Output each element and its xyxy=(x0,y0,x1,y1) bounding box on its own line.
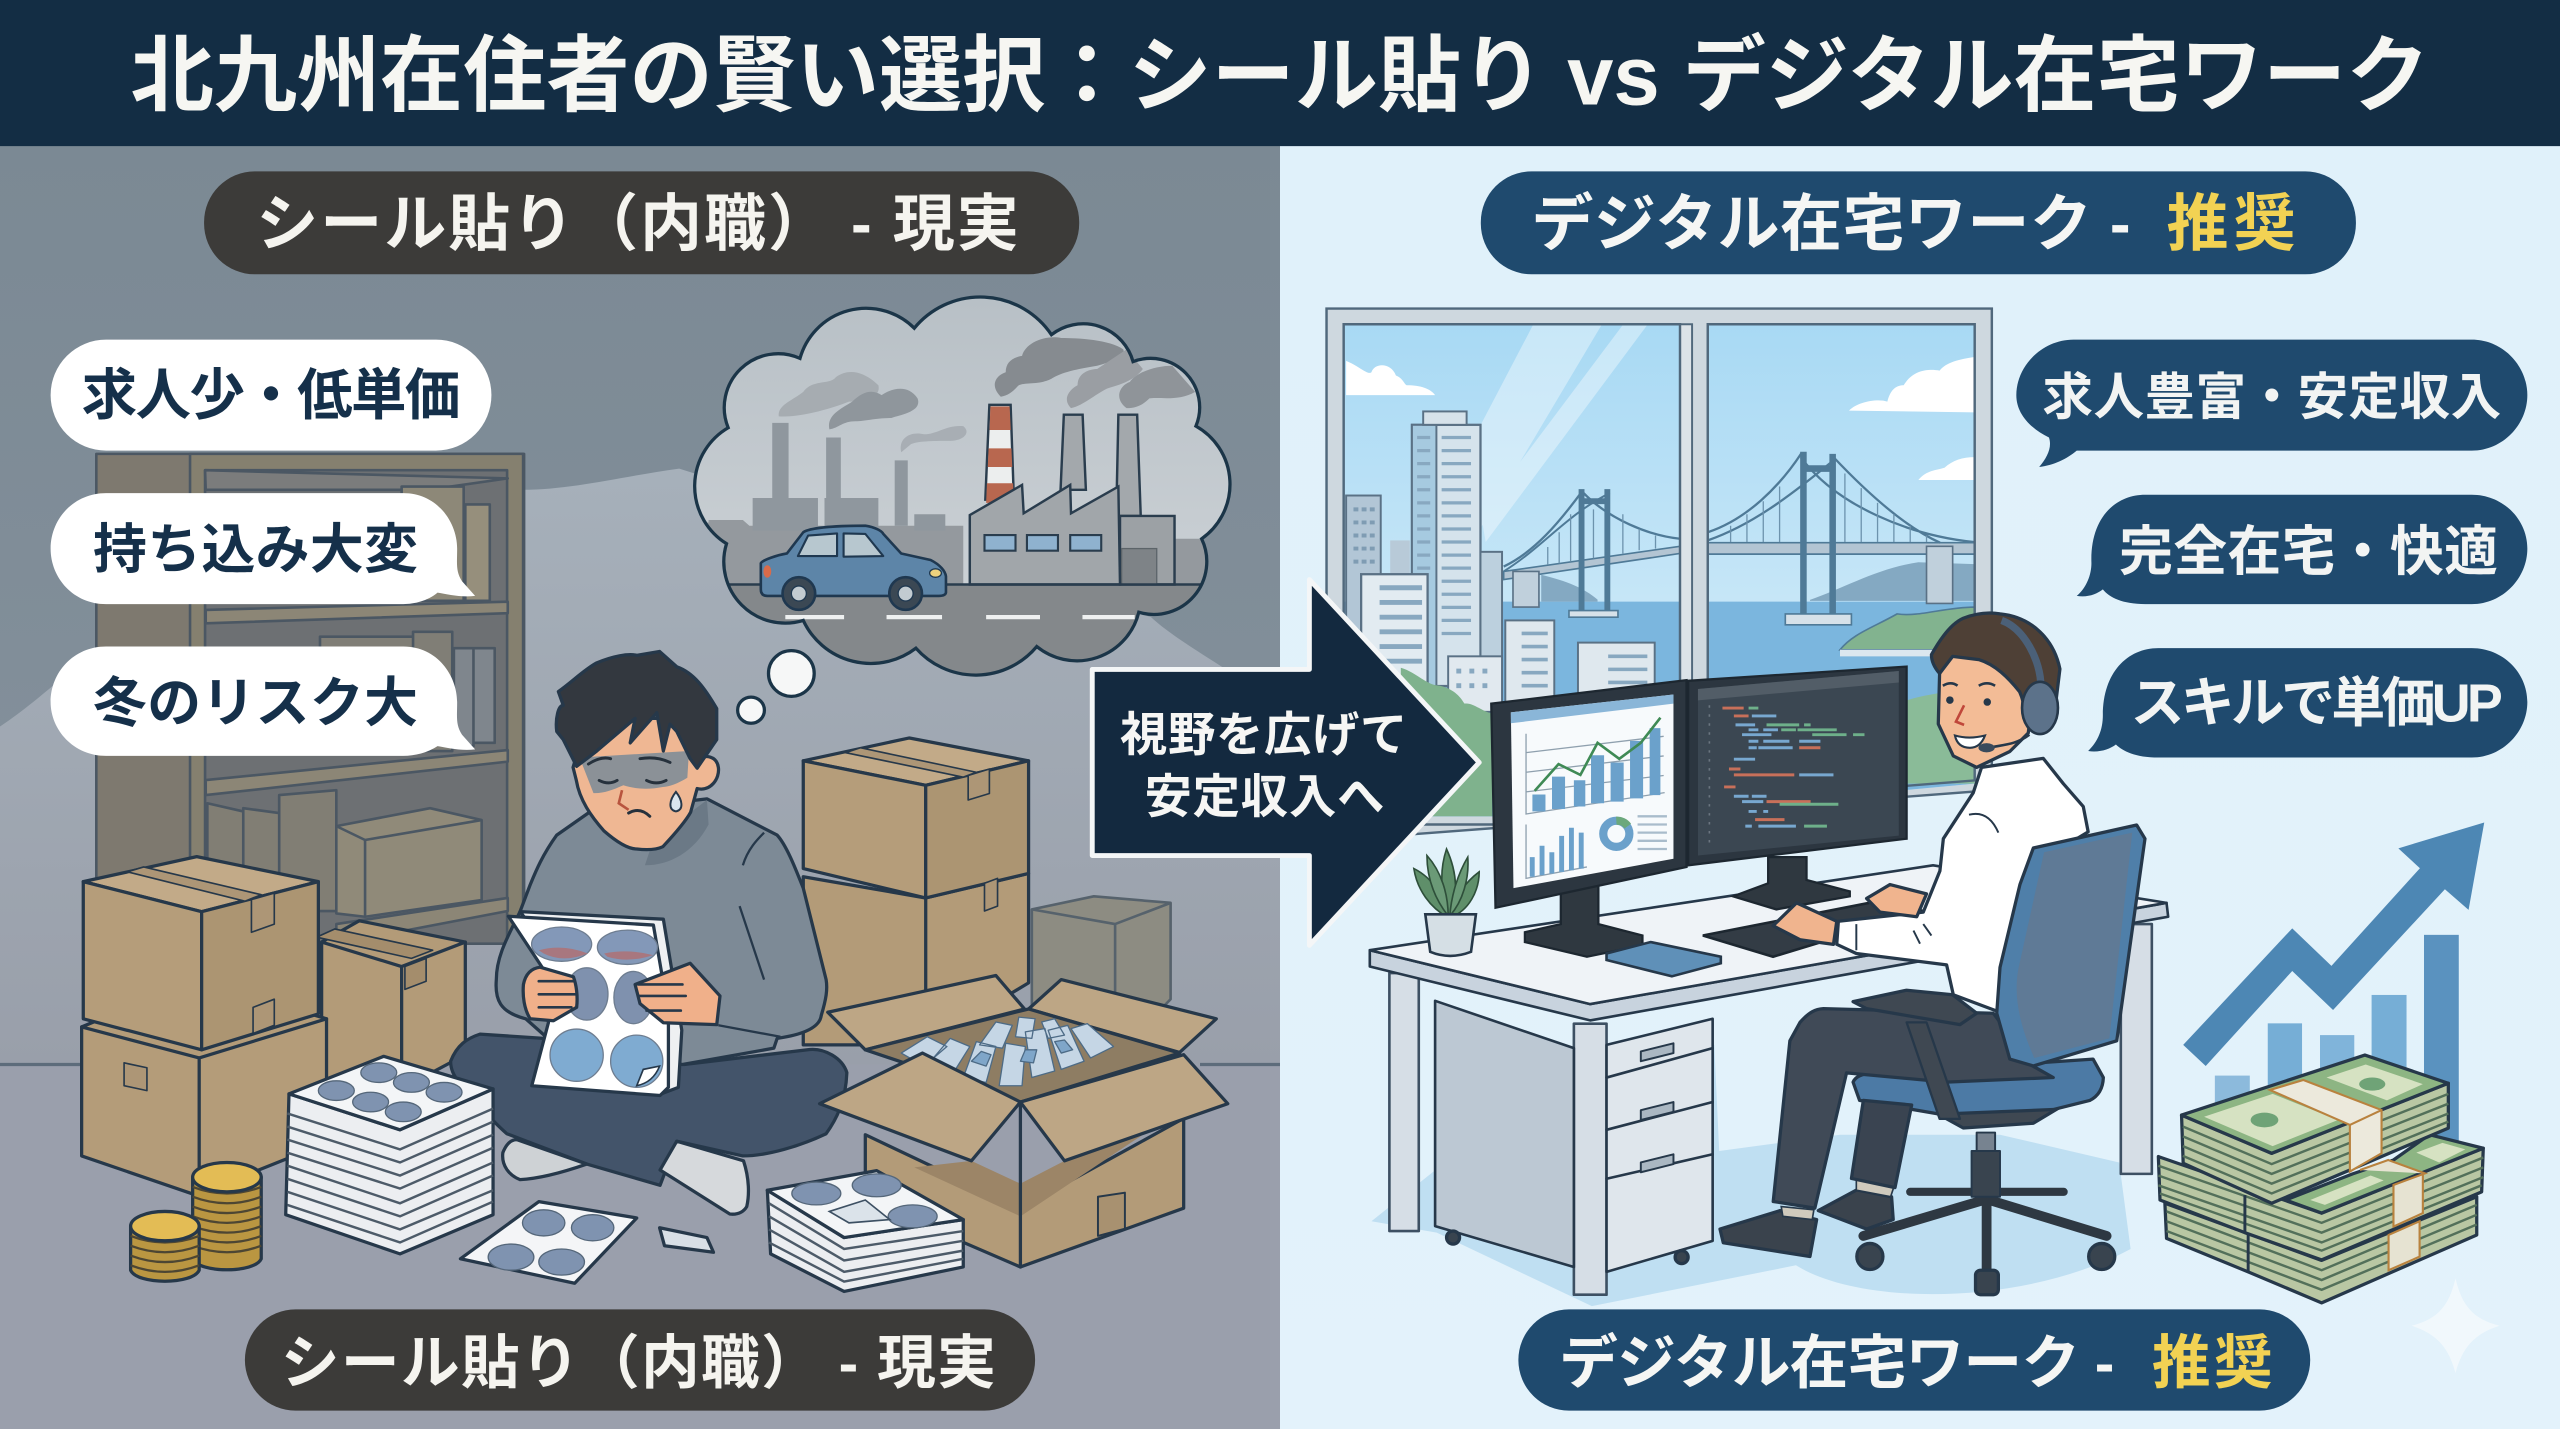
callout: fully remote comfort xyxy=(2077,495,2527,604)
callout: fully remote comfort: 完全在宅・快適 xyxy=(2119,522,2498,582)
heading: right top pill: 推奨 xyxy=(2167,190,2296,259)
man: head xyxy=(573,718,719,850)
illustration: office chair base and seat xyxy=(1853,1059,2115,1295)
worker: hands xyxy=(1773,885,1927,944)
callout: few jobs and low pay xyxy=(51,340,491,451)
illustration: loose sticker sheet xyxy=(460,1202,713,1283)
illustration: worried man with sticker sheet xyxy=(451,651,847,1214)
worker: shoes xyxy=(1720,1190,1893,1256)
panel: left background (sticker job reality) xyxy=(0,145,1280,1429)
arrow: broaden horizons: 安定収入へ xyxy=(1144,771,1384,824)
illustration: growth chart arrow and bars xyxy=(2183,823,2484,1149)
callout: hard to deliver: 持ち込み大変 xyxy=(93,520,418,580)
worker: back leg xyxy=(1851,1100,1912,1188)
illustration: small sticker stack xyxy=(767,1171,963,1291)
illustration: chair back and armrest xyxy=(1853,825,2145,1119)
callout: winter risk xyxy=(51,647,475,756)
heading: left bottom pill: シール貼り（内職） - 現実 xyxy=(281,1331,996,1396)
man: eyes, brows, mouth xyxy=(588,758,670,816)
man: left sock xyxy=(503,1140,587,1180)
heading: right top pill: デジタル在宅ワーク - xyxy=(1531,190,2131,259)
heading: left top pill: シール貼り（内職） - 現実 xyxy=(256,190,1019,259)
heading: right top pill xyxy=(1481,171,2356,274)
icon: potted plant xyxy=(1414,849,1479,956)
heading: right bottom pill xyxy=(1518,1309,2310,1411)
worker: smile, eyes and nose xyxy=(1955,736,1985,748)
illustration: filing cabinet xyxy=(1435,1001,1713,1272)
man: sweater xyxy=(496,799,827,1064)
illustration: analytics monitor xyxy=(1491,680,1687,957)
thought bubbles xyxy=(738,651,814,723)
icon: sparkle xyxy=(2411,1278,2500,1373)
icon: car xyxy=(761,526,946,610)
man: shadow on face xyxy=(580,751,689,793)
illustration: open cardboard box with stickers xyxy=(820,976,1228,1267)
cash: top bundle xyxy=(2182,1055,2448,1203)
illustration: office window with city view xyxy=(1327,309,1992,841)
worker: front leg and thigh xyxy=(1773,1009,2053,1208)
illustration: right cardboard stack xyxy=(803,738,1029,1045)
sheet of stickers xyxy=(508,912,682,1096)
callout: hard to deliver xyxy=(51,493,475,604)
callout: skill raises rate: スキルで単価UP xyxy=(2131,674,2503,734)
man: hair xyxy=(556,651,717,768)
man: hands xyxy=(523,963,720,1025)
worker: head xyxy=(1938,653,2034,767)
man: pants xyxy=(451,1034,847,1185)
worker: shirt xyxy=(1837,758,2088,1012)
cash: middle layer xyxy=(2158,1135,2483,1260)
heading: right bottom pill: 推奨 xyxy=(2152,1331,2273,1396)
worker: hair xyxy=(1931,613,2060,718)
arrow: broaden horizons: 視野を広げて xyxy=(1120,709,1407,762)
callout: skill raises rate xyxy=(2088,648,2527,758)
illustration: code monitor xyxy=(1688,667,1907,909)
callout: winter risk: 冬のリスク大 xyxy=(93,674,418,734)
callout: plenty of jobs xyxy=(2016,340,2527,467)
illustration: left cardboard stacks xyxy=(82,857,465,1195)
illustration: large sticker stack xyxy=(286,1056,493,1254)
arrow: broaden horizons xyxy=(1092,580,1479,945)
worker: socks xyxy=(1781,1179,1894,1220)
title banner: 北九州在住者の賢い選択：シール貼り vs デジタル在宅ワーク xyxy=(131,29,2429,122)
icon: coin stacks xyxy=(131,1162,261,1281)
heading: left top pill xyxy=(204,171,1079,274)
illustration: desk xyxy=(1370,865,2168,1295)
illustration: bookshelf xyxy=(96,454,524,944)
icon: tablet on desk xyxy=(1607,942,1721,976)
illustration: faded box in background xyxy=(1032,896,1171,1045)
cash: bottom layer xyxy=(2165,1197,2477,1303)
thought cloud: factory and car xyxy=(686,297,1230,699)
man: sweat drop xyxy=(670,792,681,811)
illustration: stacks of cash xyxy=(2158,1055,2483,1303)
callout: plenty of jobs: 求人豊富・安定収入 xyxy=(2042,369,2501,426)
icon: keyboard xyxy=(1703,901,1923,957)
man: right sock xyxy=(660,1141,748,1214)
worker: headset xyxy=(1978,620,2058,752)
floor shadow xyxy=(1371,1045,2131,1306)
title banner xyxy=(0,0,2560,146)
man: nose xyxy=(619,790,629,810)
panel: right background (digital remote work) xyxy=(1280,145,2560,1429)
callout: few jobs and low pay: 求人少・低単価 xyxy=(82,365,460,427)
heading: right bottom pill: デジタル在宅ワーク - xyxy=(1559,1331,2114,1396)
illustration: remote worker xyxy=(1720,613,2088,1256)
heading: left bottom pill xyxy=(245,1309,1035,1411)
